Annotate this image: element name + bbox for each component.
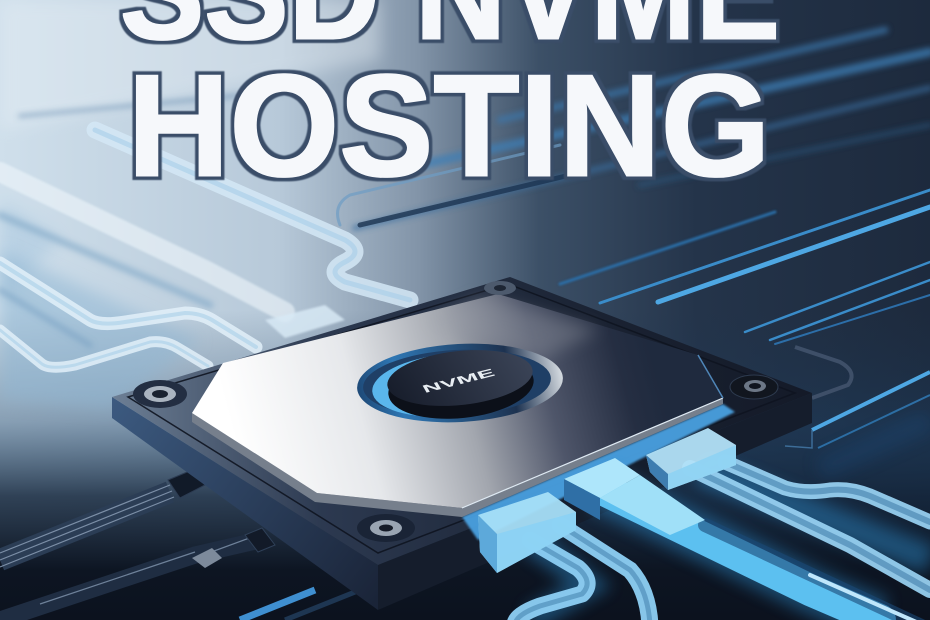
connector bottom (478, 492, 576, 573)
translucent loop and tray right (785, 347, 930, 470)
blue glow under lid (462, 404, 735, 540)
glass tubes left (0, 130, 410, 367)
drive chassis top (112, 277, 812, 565)
lid edge (192, 398, 723, 517)
screw bottom (357, 514, 415, 542)
SSD drive (112, 277, 812, 610)
dark cables lower left (0, 470, 360, 620)
screw top (484, 281, 516, 295)
screw left (133, 380, 187, 408)
cable glow right (530, 470, 930, 620)
drive chassis side left (112, 397, 378, 610)
title (120, 0, 780, 206)
connector top (646, 428, 736, 490)
metal lid (192, 294, 723, 508)
drive chassis side right (378, 393, 812, 610)
circuit traces upper right (338, 145, 930, 344)
title line: HOSTING: HOSTING (128, 44, 770, 206)
glowing cables right (515, 462, 930, 620)
screw right (730, 375, 778, 399)
NVME button (355, 339, 565, 427)
connector middle (564, 458, 705, 535)
blurred streaks upper right (0, 30, 930, 345)
NVME label: NVME (420, 366, 498, 395)
glass connector left (265, 305, 345, 338)
